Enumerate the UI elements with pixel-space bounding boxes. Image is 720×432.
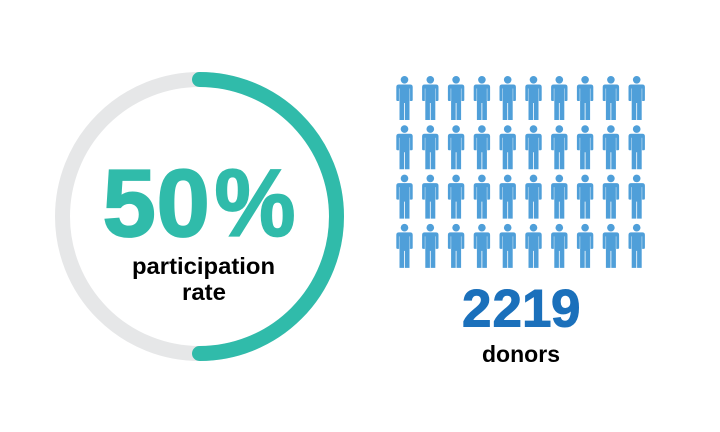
ring progress 50% <box>200 80 336 354</box>
label: donors: donors <box>482 341 560 367</box>
label: participation rate <box>132 253 275 305</box>
big percentage: 50 <box>102 150 210 257</box>
big percentage <box>102 150 296 257</box>
label: participation rate: participation <box>132 253 275 279</box>
ring track <box>62 80 336 354</box>
big percentage: % <box>214 150 296 257</box>
pictogram: donors people grid <box>396 76 645 268</box>
panel: participation ring <box>62 80 336 354</box>
donor count: 2219 <box>462 280 580 338</box>
label: participation rate: rate <box>182 279 226 305</box>
